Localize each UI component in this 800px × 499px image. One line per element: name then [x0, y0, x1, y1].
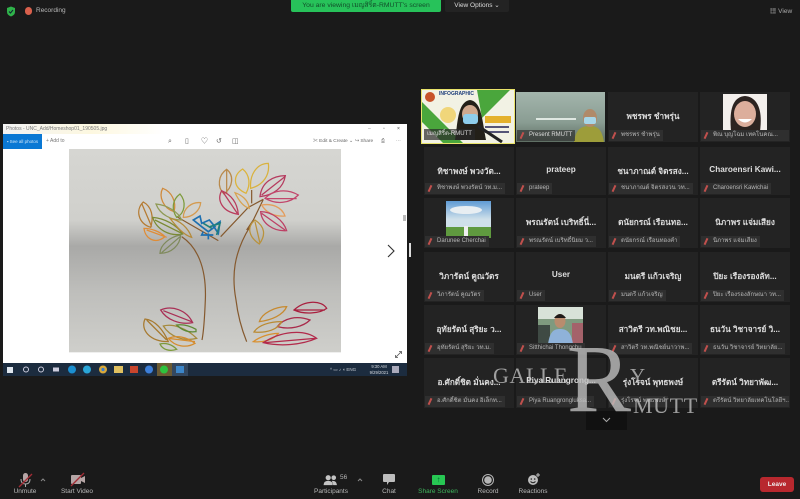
tile: นิภาพร: นิภาพร แจ่มเสียง: [713, 238, 757, 244]
banner: viewing screen: You are viewing เมญสิริ์ต-RMUTT's screen: [302, 2, 430, 9]
icon: chat: [383, 474, 395, 485]
banner: viewing screen: [291, 0, 441, 12]
add to button: + Add to: [46, 138, 64, 144]
edit and share actions: ⎙: [381, 139, 385, 144]
share screen label: Share Screen: [418, 488, 458, 495]
window title bar: ▫: [383, 126, 385, 132]
edit and share actions: ↪ Share: [355, 139, 373, 144]
cursor: [403, 215, 406, 221]
tile: ปิยะ: ปิยะ เรืองรองลัท...: [713, 272, 777, 281]
window title bar: –: [368, 126, 371, 132]
toolbar icons: ♡: [201, 138, 208, 145]
tile: มนตรี: มนตรี แก้วเจริญ: [625, 272, 681, 281]
icon: participants: [324, 475, 337, 486]
leaves left tree: [139, 163, 327, 350]
taskbar clock: [370, 364, 388, 375]
icon: muted microphone: [18, 473, 32, 488]
tile: สาวิตรี: [608, 305, 698, 355]
view options button: [445, 0, 509, 12]
icon: reactions: [528, 473, 540, 485]
participants caret: [358, 478, 362, 482]
watermark: Gallery RMUTT: [493, 325, 698, 432]
tile: พชรพร ชำพรุ่น: พชรพร ชำพรุ่น: [627, 112, 679, 121]
tile: ธนวัน: [700, 305, 790, 355]
tile: Sitthichai: [516, 305, 606, 355]
name: Present RMUTT: [529, 132, 572, 138]
tile: Charoensri: Charoensri Kawi...: [709, 165, 781, 174]
tile: อ.ศักดิ์ชิต: อ.ศักดิ์ชิต มั่นคง...: [437, 378, 501, 387]
expand icon: [395, 351, 402, 358]
tile: รุ่งโรจน์: [608, 358, 698, 408]
tile: รุ่งโรจน์: รุ่งโรจน์ พุทธพงษ์: [623, 378, 683, 387]
tile: ดนัยภรณ์: ดนัยกรณ์ เรือนทอ...: [618, 218, 688, 227]
toolbar icons: ▯: [185, 138, 189, 145]
taskbar clock: 9/29/2021: [370, 370, 388, 375]
window title bar: [3, 124, 407, 134]
tile: Sitthichai: Sitthichai Thongchu: [529, 345, 582, 351]
participant count: 56: [340, 474, 347, 481]
scroll down button: [586, 411, 627, 430]
record label: Record: [478, 488, 498, 495]
tile: Piya: Piya Ruangrong...: [526, 376, 596, 385]
tile: ดนัยภรณ์: [608, 198, 698, 248]
tile: พชรพร ชำพรุ่น: พชรพร ชำพรุ่น: [621, 132, 660, 138]
tile: ทิชาพงษ์: ทิชาพงษ์ พวงวัต...: [437, 167, 501, 176]
tile: พรณรัตน์: [516, 198, 606, 248]
tile: Charoensri: [700, 147, 790, 195]
tile: Charoensri: Charoensri Kawichai: [713, 185, 768, 191]
icon: video off: [70, 472, 85, 486]
tile: User: User: [529, 292, 542, 298]
tile: ชนาภาณต์: ชนาภาณต์ จิตรสงวน วท...: [621, 185, 690, 191]
tile: ดนัยภรณ์: ดนัยกรณ์ เรือนทองคำ: [621, 238, 677, 244]
toolbar icons: ◫: [232, 138, 239, 145]
taskbar clock: 9:30 AM: [371, 364, 387, 369]
watermark: Gallery RMUTT: GALLE: [493, 363, 568, 388]
tile: สาวิตรี: สาวิตรี วท.พณิชย์นาวาพ...: [621, 345, 689, 351]
tile: ปิยะ: ปิยะ เรืองรองลักษณา วท...: [713, 292, 781, 298]
watermark: Gallery RMUTT: Y: [630, 364, 645, 388]
presenter name: เมญสิริ์ต-RMUTT: [427, 131, 472, 137]
leaves right tree: [219, 169, 232, 194]
toolbar icons: ⌕: [168, 138, 172, 145]
tile: วิภารัตน์: วิภารัตน์ คูณวัตร: [437, 292, 481, 298]
tile: User: [516, 252, 606, 302]
edit and share actions: [313, 138, 401, 144]
tile: พรณรัตน์: พรณรัตน์ เบริทธิ์นี่...: [526, 218, 596, 227]
chat label: Chat: [382, 488, 396, 495]
tile: ตรีรัตน์: ตรีรัตน์ วิทยาพัฒ...: [712, 378, 778, 387]
tile: รุ่งโรจน์: รุ่งโรจน์ พุทธพงษ์: [621, 398, 665, 404]
taskbar: [3, 363, 407, 376]
system tray: ^ ▭ ♪ ◖ ENG: [330, 367, 356, 372]
view options button: View Options ⌄: [454, 2, 500, 9]
tile: พรณรัตน์: พรณรัตน์ เบริทธิ์นิยม ว...: [529, 238, 593, 244]
watermark: Gallery RMUTT: MUTT: [633, 393, 698, 418]
tile: มนตรี: มนตรี แก้วเจริญ: [621, 292, 663, 298]
tile: Darunee: [424, 198, 514, 248]
window title bar: Photos - UNC_Add/Homeshop01_190505.jpg: [6, 126, 107, 132]
edit and share actions: ✂ Edit & Create ⌄: [313, 139, 353, 144]
toolbar icons: [168, 138, 239, 145]
tile: พชรพร ชำพรุ่น: [608, 92, 698, 142]
reactions label: Reactions: [519, 488, 547, 495]
tile: อุทัยรัตน์: อุทัยรัตน์ สุริยะ วท.ม.: [437, 345, 491, 351]
tile: นิภาพร: นิภาพร แจ่มเสียง: [715, 218, 775, 227]
panel: shared screen window: [3, 124, 407, 376]
leave button: [760, 477, 794, 492]
tile: ปิยะ: [700, 252, 790, 302]
tile: prateep: [516, 147, 606, 195]
window title bar: ×: [397, 126, 400, 132]
icon: recording: [25, 7, 32, 15]
tile: อ.ศักดิ์ชิต: [424, 358, 514, 408]
tile: Darunee: Darunee Cherchai: [437, 238, 486, 244]
leaves ground right: [259, 307, 287, 322]
icon: share screen: [432, 475, 445, 485]
name: [517, 130, 575, 141]
see all photos button: [3, 134, 42, 149]
top bar: security and recording status: [7, 6, 66, 16]
taskbar icons: [7, 363, 399, 376]
next arrow: [388, 244, 395, 258]
tile: ทิชาพงษ์: ทิชาพงษ์ พวงรัตน์ วท.ม...: [437, 185, 502, 191]
unmute caret: [40, 478, 46, 482]
tile: photo woman: พิณ บุญโฉม เทคโนคณ...: [713, 132, 778, 138]
panel: participant gallery: [421, 89, 790, 408]
tile: ตรีรัตน์: [700, 358, 790, 408]
tile: ตรีรัตน์: ตรีรัตน์ วิทยาลัยเทคโนโลยีฯ...: [713, 398, 789, 404]
toolbar icons: ↺: [216, 138, 222, 145]
tile: presenter: [421, 89, 515, 144]
tile: ธนวัน: ธนวัน วิชาจารย์ วิทยาลัย...: [713, 345, 782, 351]
tile: สาวิตรี: สาวิตรี วท.พณิชย...: [619, 325, 687, 334]
photo of hand-drawn trees: [69, 149, 341, 352]
watermark: Gallery RMUTT: R: [567, 325, 631, 432]
tile: อุทัยรัตน์: อุทัยรัตน์ สุริยะ ว...: [436, 325, 501, 334]
see all photos button: ▪ See all photos: [7, 139, 38, 144]
icon: security shield: [7, 6, 15, 16]
tile: prateep: prateep: [546, 165, 576, 174]
tile: ชนาภาณต์: ชนาภาณต์ จิตรสง...: [617, 167, 689, 176]
toolbar: unmute control: [18, 473, 46, 488]
tile: Piya: [516, 358, 606, 408]
tile: ธนวัน: ธนวัน วิชาจารย์ วิ...: [710, 325, 780, 334]
icon: share screen: ↑: [436, 475, 440, 484]
tree trunks: [177, 190, 263, 342]
edit and share actions: ···: [396, 139, 401, 144]
start video label: Start Video: [61, 488, 93, 495]
participants label: Participants: [314, 488, 348, 495]
tile: วิภารัตน์: [424, 252, 514, 302]
recording label: Recording: [36, 7, 66, 14]
tile: Piya: Piya Ruangrongluksa...: [529, 398, 591, 404]
tile: วิภารัตน์: วิภารัตน์ คูณวัตร: [439, 272, 499, 281]
tile: User: User: [552, 270, 570, 279]
tile: นิภาพร: [700, 198, 790, 248]
tile: ทิชาพงษ์: [424, 147, 514, 195]
leaves ground left: [161, 308, 193, 323]
tile: อ.ศักดิ์ชิต: อ.ศักดิ์ชิต มั่นคง อิเล็กท...: [437, 398, 502, 404]
tile: ชนาภาณต์: [608, 147, 698, 195]
presenter name: [424, 129, 475, 140]
leave button: Leave: [768, 481, 786, 488]
view button: ▦ View: [770, 8, 792, 15]
icon: record: [482, 474, 494, 486]
unmute label: Unmute: [14, 488, 36, 495]
bird: [193, 216, 220, 239]
divider handle: [409, 243, 411, 257]
tile: อุทัยรัตน์: [424, 305, 514, 355]
tile: Present RMUTT: [516, 92, 605, 142]
tile: มนตรี: [608, 252, 698, 302]
tile: photo woman: [700, 92, 790, 142]
tile: prateep: prateep: [529, 185, 549, 191]
presenter slide title: INFOGRAPHIC: [439, 91, 474, 97]
